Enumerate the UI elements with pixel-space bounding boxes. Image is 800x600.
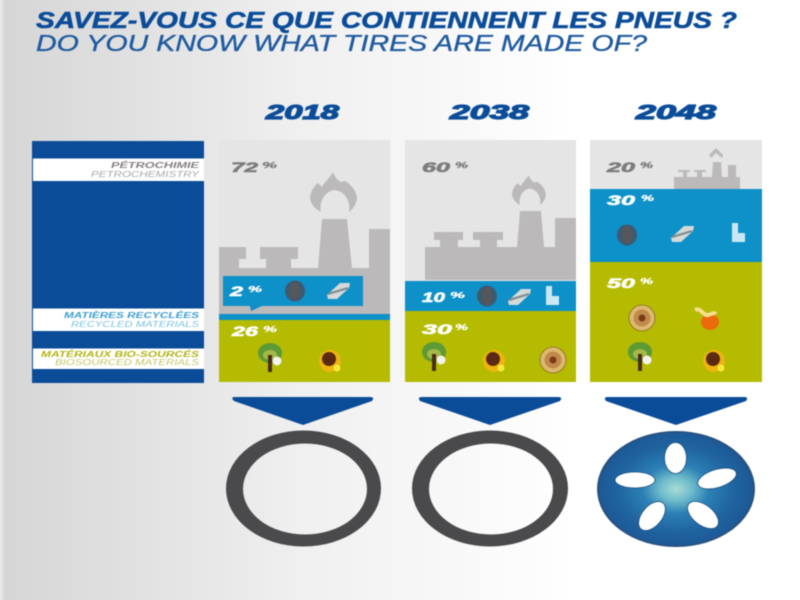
biosourced band 2018 <box>219 320 390 382</box>
value 72%: 72 <box>231 159 258 175</box>
value 2%: % <box>248 285 262 294</box>
value 30%: 30 <box>422 321 452 337</box>
factory 2048 <box>674 162 740 189</box>
title English: DO YOU KNOW WHAT TIRES ARE MADE OF? <box>36 30 647 56</box>
factory 2038 <box>425 211 576 280</box>
value 60% <box>422 159 468 175</box>
value 20% <box>605 159 653 175</box>
legend: biosourced materials: BIOSOURCED MATERIALS <box>55 358 200 367</box>
icon: tree <box>258 343 282 372</box>
value 30%: 30 <box>607 192 635 208</box>
icon: bottle <box>546 286 559 305</box>
legend: petrochemistry: PÉTROCHIMIE <box>111 161 200 170</box>
panel: 2018 <box>219 140 390 382</box>
year 2018: 2018 <box>264 102 340 124</box>
icon: sunflower <box>483 350 505 372</box>
callout 2% <box>223 276 363 311</box>
title <box>36 7 737 56</box>
year headings <box>264 102 718 124</box>
recycled band 2038 <box>405 281 576 311</box>
tire 2038 <box>412 430 568 546</box>
panel: 2038 <box>405 140 576 382</box>
icon: tree <box>628 342 652 371</box>
arrow 2038 <box>419 397 561 425</box>
value 60%: % <box>455 161 468 170</box>
value 72% <box>231 159 277 175</box>
legend: biosourced materials: MATÉRIAUX BIO-SOURCÉS <box>41 350 200 359</box>
arrow 2048 <box>605 397 747 425</box>
icon: steel <box>671 226 694 242</box>
icon: wood <box>629 305 655 331</box>
icon: sunflower <box>703 350 725 372</box>
icon: tree <box>422 342 446 371</box>
year 2038: 2038 <box>448 102 531 124</box>
icon: recycled tire <box>285 280 305 302</box>
icon: bottle <box>732 223 745 242</box>
biosourced band 2048 <box>590 262 762 382</box>
value 2%: 2 <box>228 283 243 299</box>
legend: recycled materials: MATIÈRES RECYCLÉES <box>64 311 200 320</box>
recycled band 2048 <box>590 189 762 262</box>
value 50%: 50 <box>607 275 635 291</box>
icon: recycled tire <box>617 224 637 246</box>
value 60%: 60 <box>422 159 450 175</box>
value 26%: % <box>263 325 277 334</box>
icon: steel <box>508 289 531 305</box>
tire openings <box>615 442 739 535</box>
flame 2048 <box>709 148 723 158</box>
flame 2018 <box>310 172 357 212</box>
icon: steel <box>327 283 350 299</box>
legend: recycled materials: RECYCLED MATERIALS <box>71 320 200 329</box>
panel: 2048 <box>590 140 762 382</box>
value 2% <box>228 283 262 299</box>
icon: recycled tire <box>477 286 497 306</box>
value 50% <box>607 275 653 291</box>
factory 2018 <box>219 219 390 314</box>
flame 2038 <box>512 175 546 205</box>
value 30%: % <box>455 323 468 332</box>
legend: petrochemistry: PETROCHEMISTRY <box>91 170 200 179</box>
year 2048: 2048 <box>634 102 718 124</box>
value 26% <box>230 323 277 339</box>
legend: recycled materials <box>64 311 200 329</box>
legend: petrochemistry <box>91 161 200 179</box>
arrow 2018 <box>232 397 373 425</box>
icon: sunflower <box>319 350 341 372</box>
recycled band 2018 <box>219 314 390 320</box>
tire 2018 <box>226 430 381 546</box>
biosourced band 2038 <box>405 311 576 382</box>
value 72%: % <box>262 161 277 170</box>
value 30%: % <box>641 194 654 203</box>
value 50%: % <box>640 277 653 286</box>
value 10% <box>422 289 465 305</box>
legend: biosourced materials <box>41 350 200 367</box>
icon: orange peel <box>695 309 719 330</box>
panel: legend <box>32 141 204 383</box>
icon: wood <box>540 347 566 373</box>
value 30% <box>607 192 654 208</box>
airless tire 2048 <box>597 431 755 547</box>
value 26%: 26 <box>230 323 258 339</box>
value 10%: 10 <box>422 289 445 305</box>
value 30% <box>422 321 468 337</box>
value 20%: % <box>640 161 653 170</box>
value 20%: 20 <box>605 159 635 175</box>
value 10%: % <box>450 291 465 300</box>
title French: SAVEZ-VOUS CE QUE CONTIENNENT LES PNEUS ? <box>36 7 737 33</box>
